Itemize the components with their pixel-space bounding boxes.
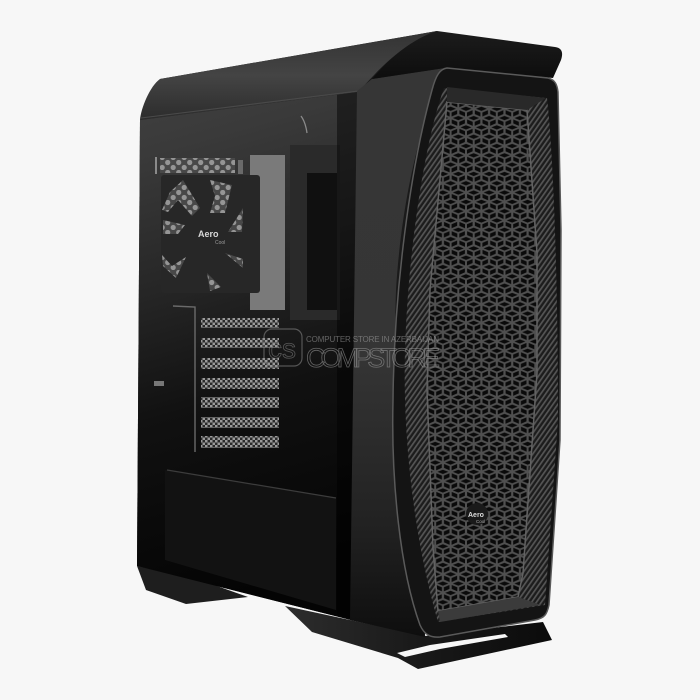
handle slot opening <box>397 634 508 657</box>
watermark logo: cs <box>268 333 296 364</box>
PSU shroud <box>165 491 336 610</box>
vent bracket right <box>238 160 243 174</box>
rear fan: Cool <box>215 240 225 246</box>
right glass border <box>337 92 357 366</box>
rear compartment cut-out <box>307 173 337 310</box>
fan logo: Aero <box>198 229 219 239</box>
body silhouette <box>137 31 445 637</box>
front logo badge <box>466 503 488 525</box>
top panel <box>140 31 437 120</box>
shroud top edge <box>167 470 336 498</box>
top vent <box>160 158 235 173</box>
watermark name: COMPSTORE <box>306 343 440 373</box>
mesh grille bottom lip <box>438 597 541 622</box>
interior seen through glass <box>154 90 358 630</box>
expansion slots <box>201 318 279 448</box>
glass side panel <box>137 90 358 630</box>
grey cable cover <box>250 155 285 310</box>
front bezel <box>393 68 561 637</box>
left port detail <box>154 381 164 386</box>
watermark tagline: COMPUTER STORE IN AZERBAIJAN <box>306 335 439 344</box>
watermark <box>264 329 440 373</box>
front logo badge: Cool <box>476 519 485 524</box>
mesh grille <box>427 102 537 611</box>
product photo: PC case <box>137 31 562 669</box>
left rear foot <box>137 566 248 604</box>
vent bracket left <box>155 157 157 174</box>
front logo badge: Aero <box>468 512 484 519</box>
motherboard tray line <box>173 306 195 452</box>
front top black cap <box>372 31 562 79</box>
rear fan <box>161 175 260 293</box>
cable detail <box>301 116 307 133</box>
corner pillar <box>350 68 445 637</box>
mesh grille top lip <box>447 87 546 110</box>
striped side vents <box>405 88 558 622</box>
fan hole patches <box>162 180 243 291</box>
watermark logo <box>264 329 302 366</box>
top edge highlight <box>141 91 358 118</box>
base foot with handle slot <box>285 606 552 669</box>
rear compartment <box>290 145 340 320</box>
